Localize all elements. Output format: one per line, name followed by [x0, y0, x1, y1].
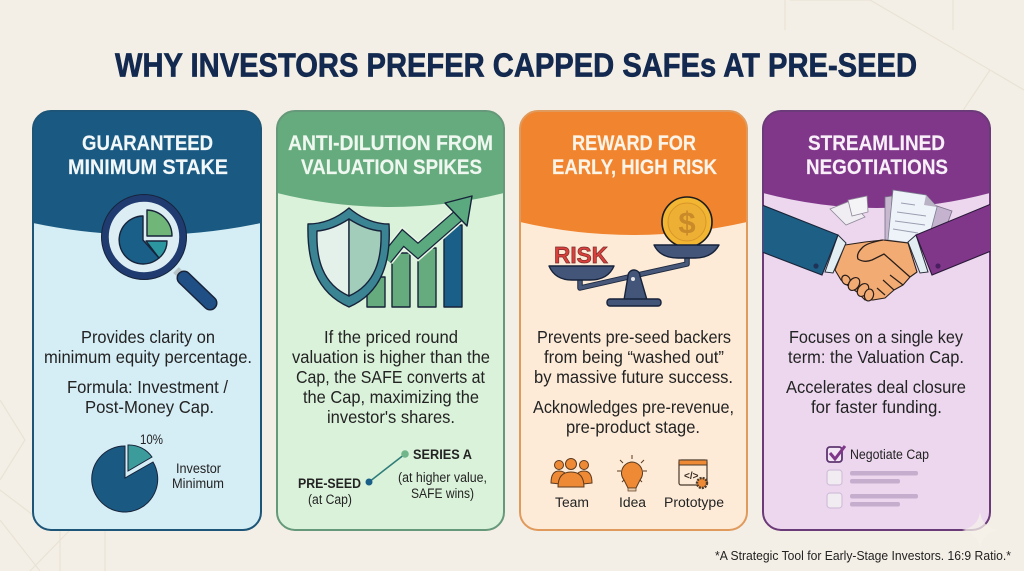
icon: prototype window: Prototype	[664, 495, 724, 510]
text: reward	[533, 327, 734, 437]
heading: anti-dilution	[288, 132, 493, 179]
checklist: negotiate cap: Negotiate Cap	[850, 447, 929, 462]
heading: guaranteed minimum stake	[68, 132, 228, 179]
text: clarity: Formula: Investment /	[67, 377, 228, 397]
icon: team: Team	[555, 495, 589, 510]
text: reward: Prevents pre-seed backers	[537, 327, 731, 347]
diagram: pre-seed to series A	[298, 447, 487, 507]
text: negotiations	[786, 327, 966, 417]
pie chart: investor minimum 10%	[92, 432, 224, 512]
icon: magnifying glass over pie chart	[102, 194, 210, 303]
text: reward: pre-product stage.	[566, 417, 700, 437]
text: conversion: valuation is higher than the	[292, 347, 490, 367]
checklist: negotiate cap	[827, 446, 929, 508]
text: reward: Acknowledges pre-revenue,	[533, 397, 734, 417]
panel: streamlined negotiations	[762, 111, 991, 530]
icon: growth bars with arrow	[367, 196, 472, 307]
footnote: *A Strategic Tool for Early-Stage Investors. 16:9 Ratio.*	[715, 548, 1011, 563]
text: negotiations: Focuses on a single key	[789, 327, 963, 347]
icon: balance scale with risk and coin: RISK	[554, 242, 608, 268]
pie chart: investor minimum 10%: Minimum	[172, 476, 224, 491]
text: reward: by massive future success.	[534, 367, 733, 387]
heading: reward: REWARD FOR	[572, 132, 696, 155]
text: conversion: the Cap, maximizing the	[303, 387, 479, 407]
icon: balance scale with risk and coin	[549, 197, 719, 306]
text: reward: from being “washed out”	[544, 347, 724, 367]
panel: reward for early, high risk	[520, 111, 747, 530]
heading: guaranteed minimum stake: MINIMUM STAKE	[68, 156, 228, 179]
heading: streamlined	[806, 132, 948, 179]
text: conversion: If the priced round	[324, 327, 458, 347]
icon: balance scale with risk and coin: $	[678, 205, 696, 240]
text: conversion: investor's shares.	[327, 407, 455, 427]
icon: shield	[308, 208, 389, 307]
heading: reward: EARLY, HIGH RISK	[552, 156, 717, 179]
text: conversion	[292, 327, 490, 427]
text: clarity: minimum equity percentage.	[44, 347, 252, 367]
text: negotiations: Accelerates deal closure	[786, 377, 966, 397]
diagram: pre-seed to series A: SERIES A	[413, 447, 472, 462]
text: clarity: Post-Money Cap.	[85, 397, 214, 417]
icon: documents	[830, 190, 952, 245]
text: clarity: Provides clarity on	[81, 327, 215, 347]
panel: guaranteed minimum stake	[33, 111, 261, 530]
icon: team	[551, 458, 592, 510]
heading: guaranteed minimum stake: GUARANTEED	[82, 132, 213, 155]
heading: streamlined: STREAMLINED	[808, 132, 945, 155]
text: negotiations: for faster funding.	[811, 397, 942, 417]
heading: streamlined: NEGOTIATIONS	[806, 156, 948, 179]
pie chart: investor minimum 10%: Investor	[176, 461, 221, 476]
panel: anti-dilution from valuation spikes	[277, 111, 504, 530]
diagram: pre-seed to series A: SAFE wins)	[411, 486, 474, 501]
text: conversion: Cap, the SAFE converts at	[296, 367, 485, 387]
icon: prototype window: </>	[684, 471, 699, 482]
icon: idea bulb: Idea	[619, 495, 646, 510]
heading: anti-dilution: VALUATION SPIKES	[301, 156, 482, 179]
diagram: pre-seed to series A: PRE-SEED	[298, 476, 361, 491]
heading: anti-dilution: ANTI-DILUTION FROM	[288, 132, 493, 155]
text: clarity	[44, 327, 252, 417]
pie chart: investor minimum 10%: 10%	[140, 432, 163, 447]
icon: handshake	[762, 204, 991, 302]
text: negotiations: term: the Valuation Cap.	[788, 347, 964, 367]
diagram: pre-seed to series A: (at higher value,	[398, 470, 487, 485]
heading: reward	[552, 132, 717, 179]
title: WHY INVESTORS PREFER CAPPED SAFEs AT PRE-SEED	[115, 48, 917, 84]
icon: idea bulb	[617, 455, 647, 510]
diagram: pre-seed to series A: (at Cap)	[308, 492, 352, 507]
icon: prototype window	[664, 460, 724, 510]
